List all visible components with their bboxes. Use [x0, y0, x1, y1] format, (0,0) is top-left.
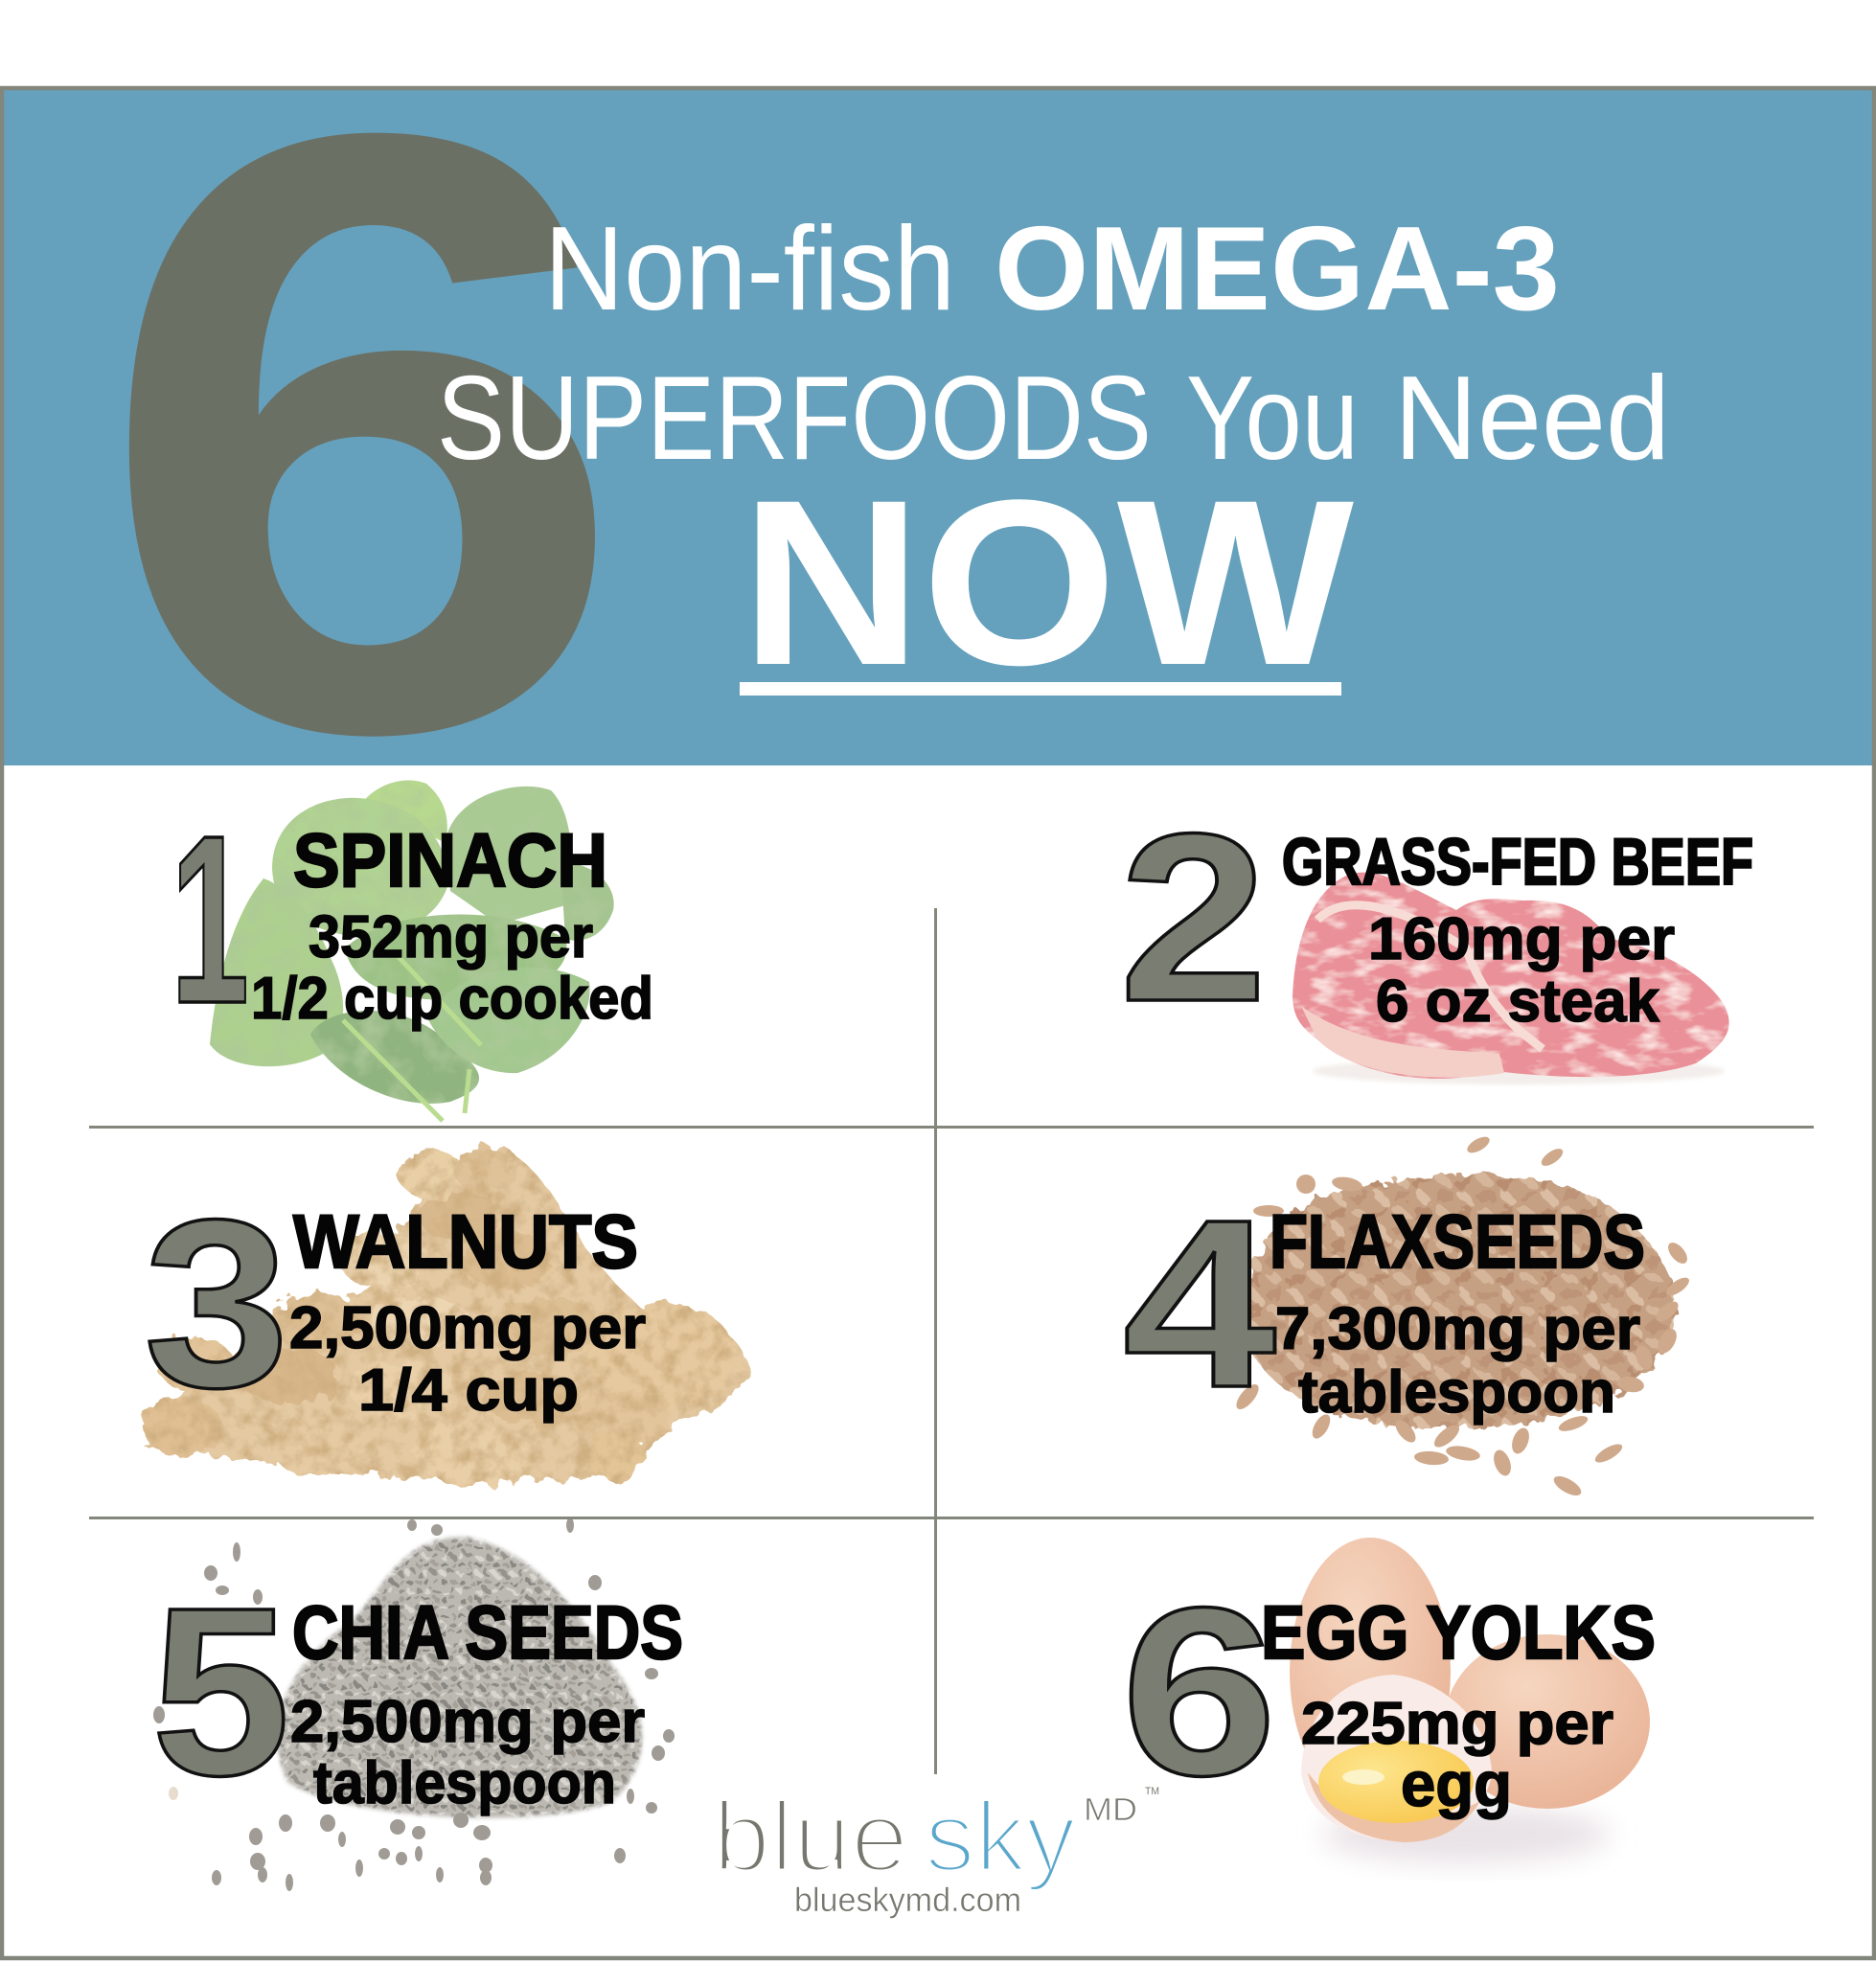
number 4: 4	[1123, 1170, 1276, 1437]
serving: tablespoon	[1298, 1359, 1615, 1426]
item 3: walnuts	[144, 1170, 646, 1437]
website: blueskymd.com	[794, 1882, 1021, 1919]
title: Non-fish	[544, 203, 955, 335]
serving: tablespoon	[313, 1750, 616, 1816]
heading: grass-fed beef: GRASS-FED BEEF	[1282, 825, 1753, 899]
trademark: TM	[1145, 1786, 1159, 1797]
divider grid	[89, 908, 1814, 1774]
item 2: grass-fed beef	[1119, 784, 1753, 1051]
serving: egg	[1401, 1748, 1512, 1819]
cracked shell	[1301, 1675, 1492, 1842]
title	[437, 203, 1670, 715]
eggs image	[1290, 1538, 1650, 1863]
wordmark sky: sky	[925, 1782, 1076, 1893]
heading: egg yolks: EGG YOLKS	[1261, 1589, 1656, 1675]
item 4: flaxseeds	[1123, 1170, 1645, 1437]
item 1: spinach	[171, 786, 653, 1053]
title: Need	[1394, 353, 1670, 485]
number 5: 5	[151, 1558, 290, 1825]
egg yolk	[1318, 1741, 1474, 1823]
title: OMEGA-3	[995, 203, 1560, 335]
flaxseeds image	[1232, 1133, 1692, 1499]
title: You	[1186, 353, 1359, 485]
amount: 7,300mg per	[1275, 1296, 1640, 1362]
amount: 225mg per	[1301, 1691, 1613, 1757]
serving: 1/4 cup	[358, 1357, 579, 1424]
number 1: 1	[171, 786, 249, 1053]
serving: 1/2 cup cooked	[251, 966, 653, 1032]
number 6: 6	[1121, 1558, 1277, 1825]
heading: chia seeds: CHIA SEEDS	[292, 1589, 683, 1675]
MD mark: MD	[1084, 1791, 1137, 1827]
logo: blue sky MD	[713, 1782, 1159, 1919]
yolk highlight	[1342, 1769, 1384, 1785]
lower shell	[1308, 1772, 1480, 1842]
right egg	[1445, 1634, 1650, 1809]
walnuts image	[142, 1148, 749, 1485]
title: NOW	[741, 451, 1354, 715]
wordmark blue: blue	[713, 1782, 908, 1893]
header panel	[2, 0, 1874, 909]
steak image	[1293, 873, 1729, 1084]
item 6: egg yolks	[1121, 1558, 1656, 1825]
number 2: 2	[1119, 784, 1268, 1051]
chia seeds image	[153, 1517, 675, 1891]
item 5: chia seeds	[151, 1558, 683, 1825]
title underline	[740, 682, 1341, 696]
amount: 2,500mg per	[290, 1689, 645, 1755]
heading: walnuts: WALNUTS	[293, 1198, 638, 1284]
amount: 352mg per	[309, 904, 593, 970]
heading: spinach: SPINACH	[293, 817, 607, 902]
amount: 2,500mg per	[289, 1295, 646, 1361]
heading: flaxseeds: FLAXSEEDS	[1270, 1198, 1645, 1284]
title: SUPERFOODS	[437, 353, 1152, 485]
spinach image	[210, 781, 614, 1121]
number 3: 3	[144, 1170, 289, 1437]
serving: 6 oz steak	[1376, 969, 1660, 1035]
back egg	[1290, 1538, 1451, 1806]
amount: 160mg per	[1368, 906, 1675, 972]
